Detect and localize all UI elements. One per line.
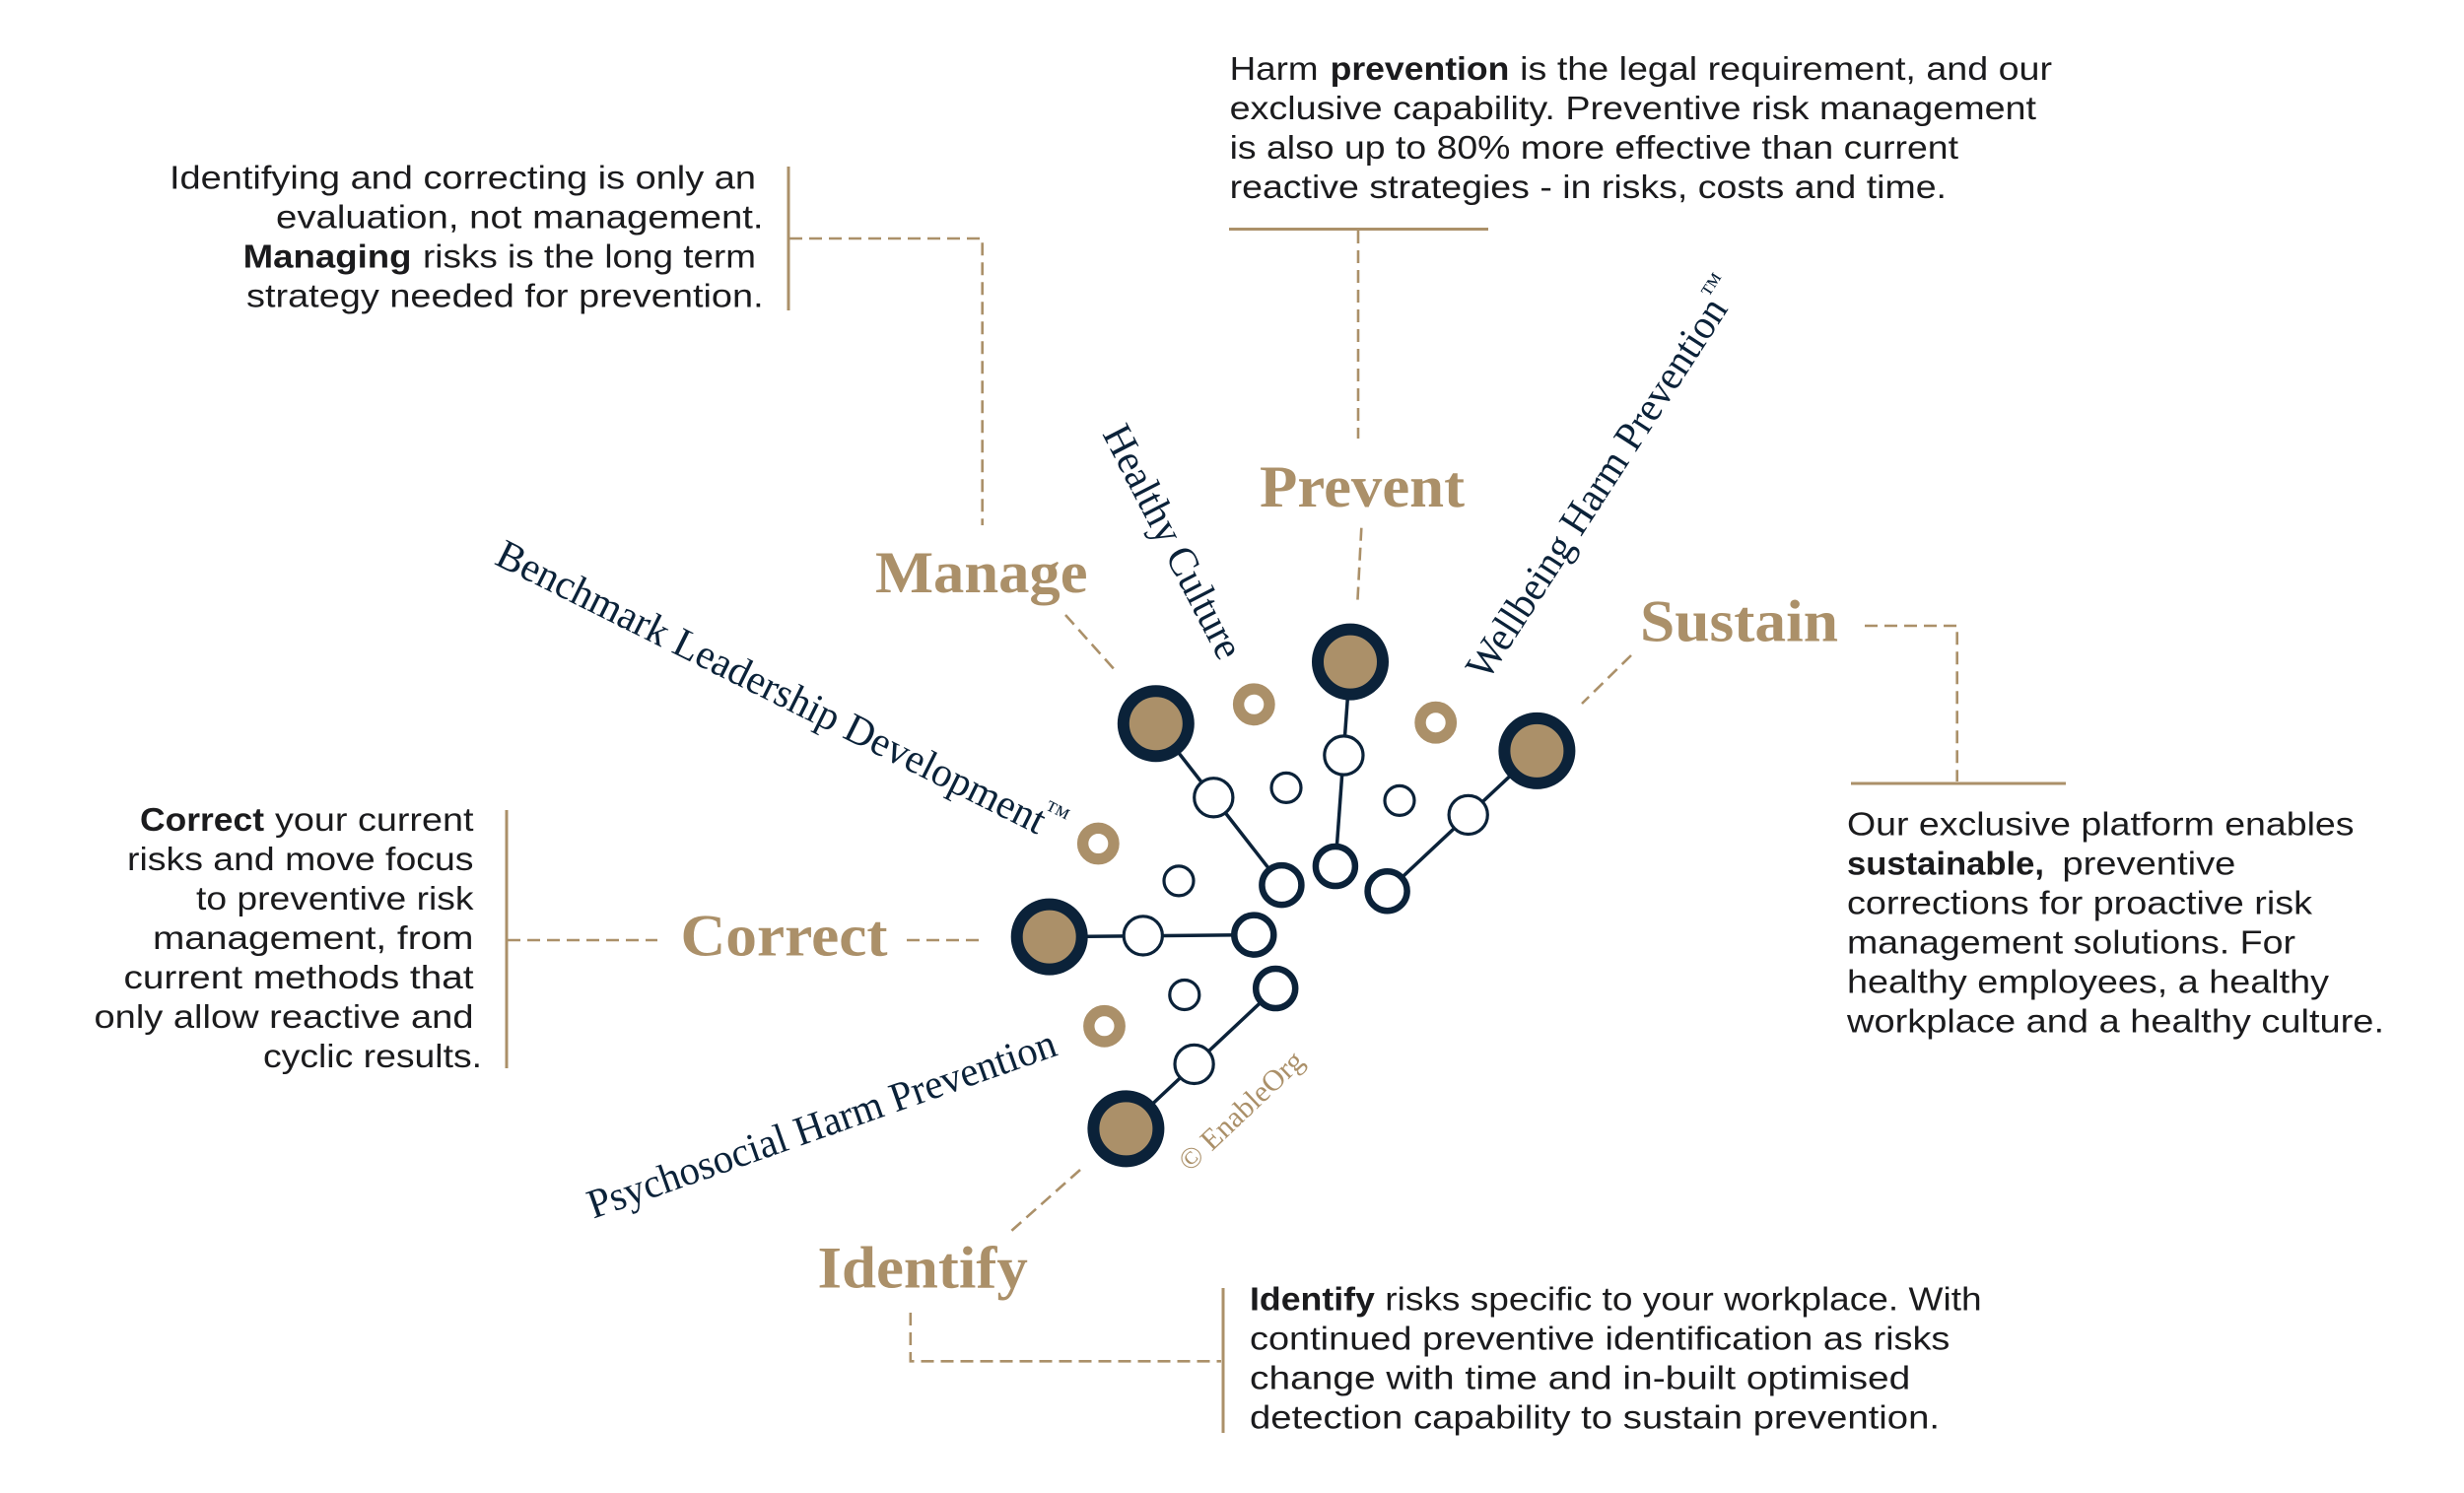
text block: manage: risks is the long term — [423, 238, 756, 275]
connector: sustain heading to text — [1851, 626, 2066, 783]
heading: Identify: Identify — [818, 1236, 1028, 1301]
text block: prevent: is the legal requirement, and our — [1520, 50, 2052, 87]
text block: identify: Identify — [1250, 1280, 1376, 1317]
text block: sustain: healthy employees, a healthy — [1847, 964, 2330, 999]
connector: Correct heading to node — [907, 939, 986, 941]
text block: correct: risks and move focus — [127, 841, 473, 877]
gold rings — [1083, 689, 1451, 1042]
text block: correct: only allow reactive and — [95, 998, 473, 1035]
text block: prevent — [1230, 50, 2052, 205]
text block: correct — [95, 801, 482, 1074]
rotated label: Benchmark Leadership Development: Benchmark Leadership Development — [489, 531, 1054, 844]
connector: manage text to heading — [788, 167, 983, 525]
heading: Correct: Correct — [680, 903, 888, 968]
rotated label: Benchmark Leadership Development: ™ — [1039, 794, 1074, 832]
connector: Prevent heading to node — [1357, 528, 1361, 603]
text block: prevent: prevention — [1331, 50, 1509, 87]
text block: correct: to preventive risk — [196, 880, 474, 916]
text block: identify — [1250, 1280, 1982, 1435]
heading: Sustain: Sustain — [1640, 589, 1838, 654]
node chain: prevent — [1316, 630, 1383, 886]
connector: identify heading to text — [911, 1288, 1223, 1433]
connector: correct text to heading — [507, 810, 657, 1068]
text block: prevent: Harm — [1230, 50, 1319, 87]
rotated label: Healthy Culture: Healthy Culture — [1093, 417, 1252, 667]
text block: sustain: corrections for proactive risk — [1847, 885, 2313, 920]
text block: identify: continued preventive identification as risks — [1250, 1320, 1950, 1356]
text block: manage — [170, 160, 764, 314]
rotated label: Psychosocial Harm Prevention: Psychosocial Harm Prevention — [582, 1021, 1062, 1228]
text block: correct: current methods that — [124, 959, 473, 995]
node chain: sustain — [1368, 718, 1569, 911]
heading: Manage: Manage — [875, 540, 1088, 605]
connector: Identify heading to node — [1010, 1170, 1080, 1232]
connector: Manage heading to node — [1065, 615, 1117, 672]
text block: correct: your current — [275, 801, 473, 838]
text block: prevent: is also up to 80% more effective than current — [1230, 129, 1958, 166]
heading: Prevent: Prevent — [1260, 454, 1465, 519]
text block: identify: change with time and in-built optimised — [1250, 1359, 1910, 1395]
text block: sustain: management solutions. For — [1847, 924, 2295, 960]
node chain: correct — [1017, 905, 1273, 970]
rotated label: Wellbeing Harm Prevention: ™ — [1695, 268, 1733, 305]
text block: correct: cyclic results. — [263, 1038, 482, 1074]
text block: sustain: Our exclusive platform enables — [1847, 806, 2354, 842]
text block: prevent: exclusive capability. Preventive risk management — [1230, 90, 2036, 126]
text block: sustain: sustainable, — [1847, 846, 2044, 881]
text block: identify: detection capability to sustain prevention. — [1250, 1398, 1940, 1435]
connector: prevent text to heading — [1229, 229, 1488, 439]
connector: Sustain heading to node — [1582, 655, 1631, 704]
text block: sustain: workplace and a healthy culture. — [1846, 1003, 2384, 1039]
rotated label: Wellbeing Harm Prevention: Wellbeing Harm Prevention — [1458, 290, 1737, 687]
text block: correct: Correct — [140, 801, 264, 838]
node chain: identify — [1093, 969, 1295, 1161]
text block: manage: Managing — [243, 238, 412, 275]
text block: identify: risks specific to your workplace. With — [1385, 1280, 1982, 1317]
small open circles — [1164, 773, 1414, 1009]
text block: manage: evaluation, not management. — [276, 199, 764, 236]
text block: manage: Identifying and correcting is only an — [170, 160, 756, 196]
copyright label: © EnableOrg — [1172, 1045, 1311, 1178]
text block: sustain — [1846, 806, 2384, 1039]
text block: manage: strategy needed for prevention. — [246, 278, 764, 314]
node chain: manage — [1124, 691, 1301, 905]
text block: sustain: preventive — [2062, 846, 2235, 881]
text block: correct: management, from — [153, 919, 473, 956]
text block: prevent: reactive strategies - in risks, costs and time. — [1230, 169, 1947, 205]
